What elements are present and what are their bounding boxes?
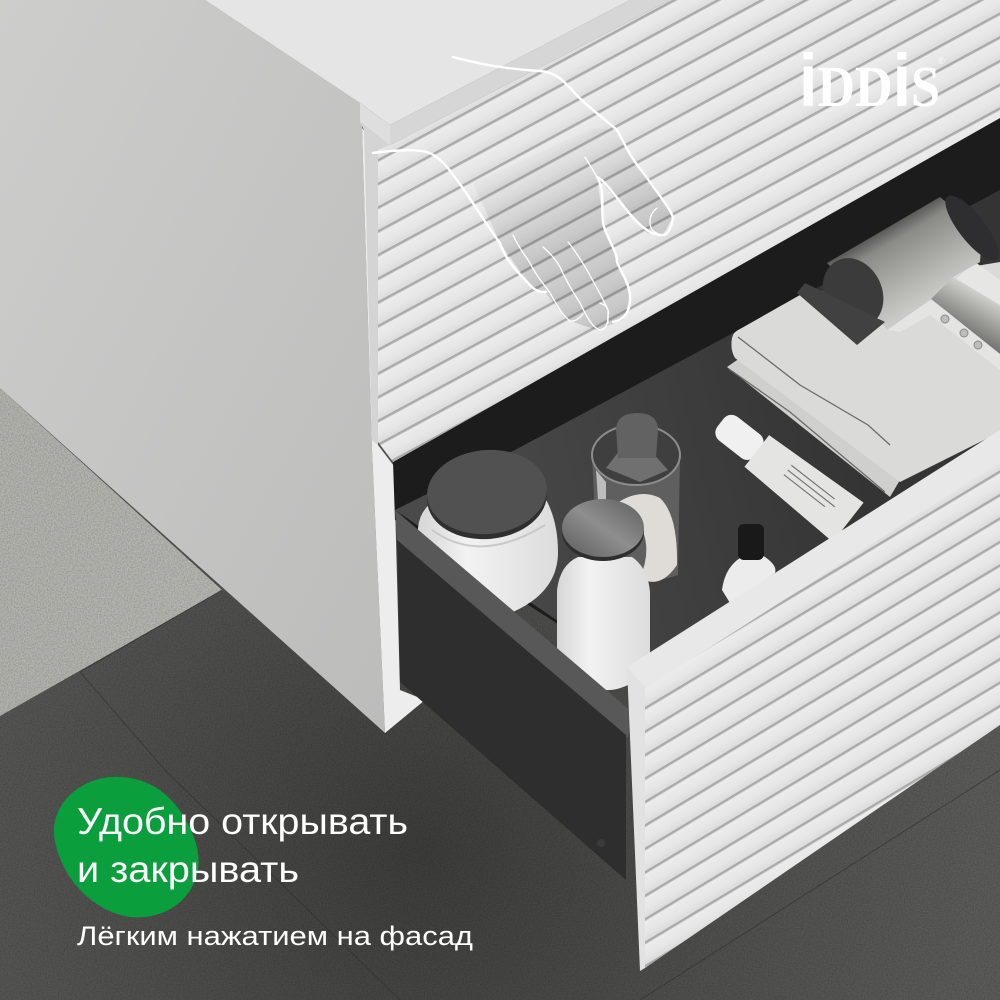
wall [0,388,222,716]
towel top layer [731,262,1000,482]
green blob [54,777,199,917]
countertop lip [390,0,670,145]
title [77,801,408,890]
logo: iddis: iDDiS [799,39,940,122]
jar neck ring [432,525,545,546]
drawer floor [395,190,1000,668]
hand shading [473,128,673,330]
ribbed face [643,460,1000,968]
upper drawer ribbed front [378,0,1000,462]
towel bottom layer [727,358,900,497]
towel edge lines [729,337,890,492]
drawer side wall [397,540,626,880]
towel stack [727,262,1000,497]
inner puck [617,494,677,582]
dryer base with buttons [887,300,1000,370]
floor tile joints [80,590,1000,1000]
hand lines [373,57,673,330]
jar [418,445,558,612]
dryer nozzle [797,283,885,345]
screw [597,839,605,847]
dryer body [827,197,982,330]
title: Удобно открывать [77,801,408,842]
dryer front ring [812,248,894,338]
left strip [627,667,645,971]
glass bottle [592,413,680,582]
dryer grille [937,188,1000,268]
white bottle [557,499,650,690]
drawer back wall [393,118,1000,668]
cabinet side panel [0,0,385,733]
countertop corner [360,103,390,145]
dryer buttons [941,315,982,349]
countertop [205,0,630,125]
icon: hand outline [373,57,673,330]
cabinet front edge strip [362,128,425,733]
title: и закрывать [77,849,299,890]
pump cap [616,413,658,458]
subtitle: Лёгким нажатием на фасад [77,921,473,951]
small dropper bottle [722,524,775,603]
hair dryer [797,188,1000,370]
upper side edge [360,122,392,445]
glass reflection [596,470,606,505]
dryer handle [930,277,1000,354]
registered mark: ® [938,56,945,66]
pump collar [606,450,668,482]
top band [627,430,1000,690]
floor and wall grain [0,388,1000,1000]
drawer side rim [395,510,632,738]
towel strip beside handle [955,262,1000,320]
tube with label [705,403,864,542]
lower drawer front [627,430,1000,971]
